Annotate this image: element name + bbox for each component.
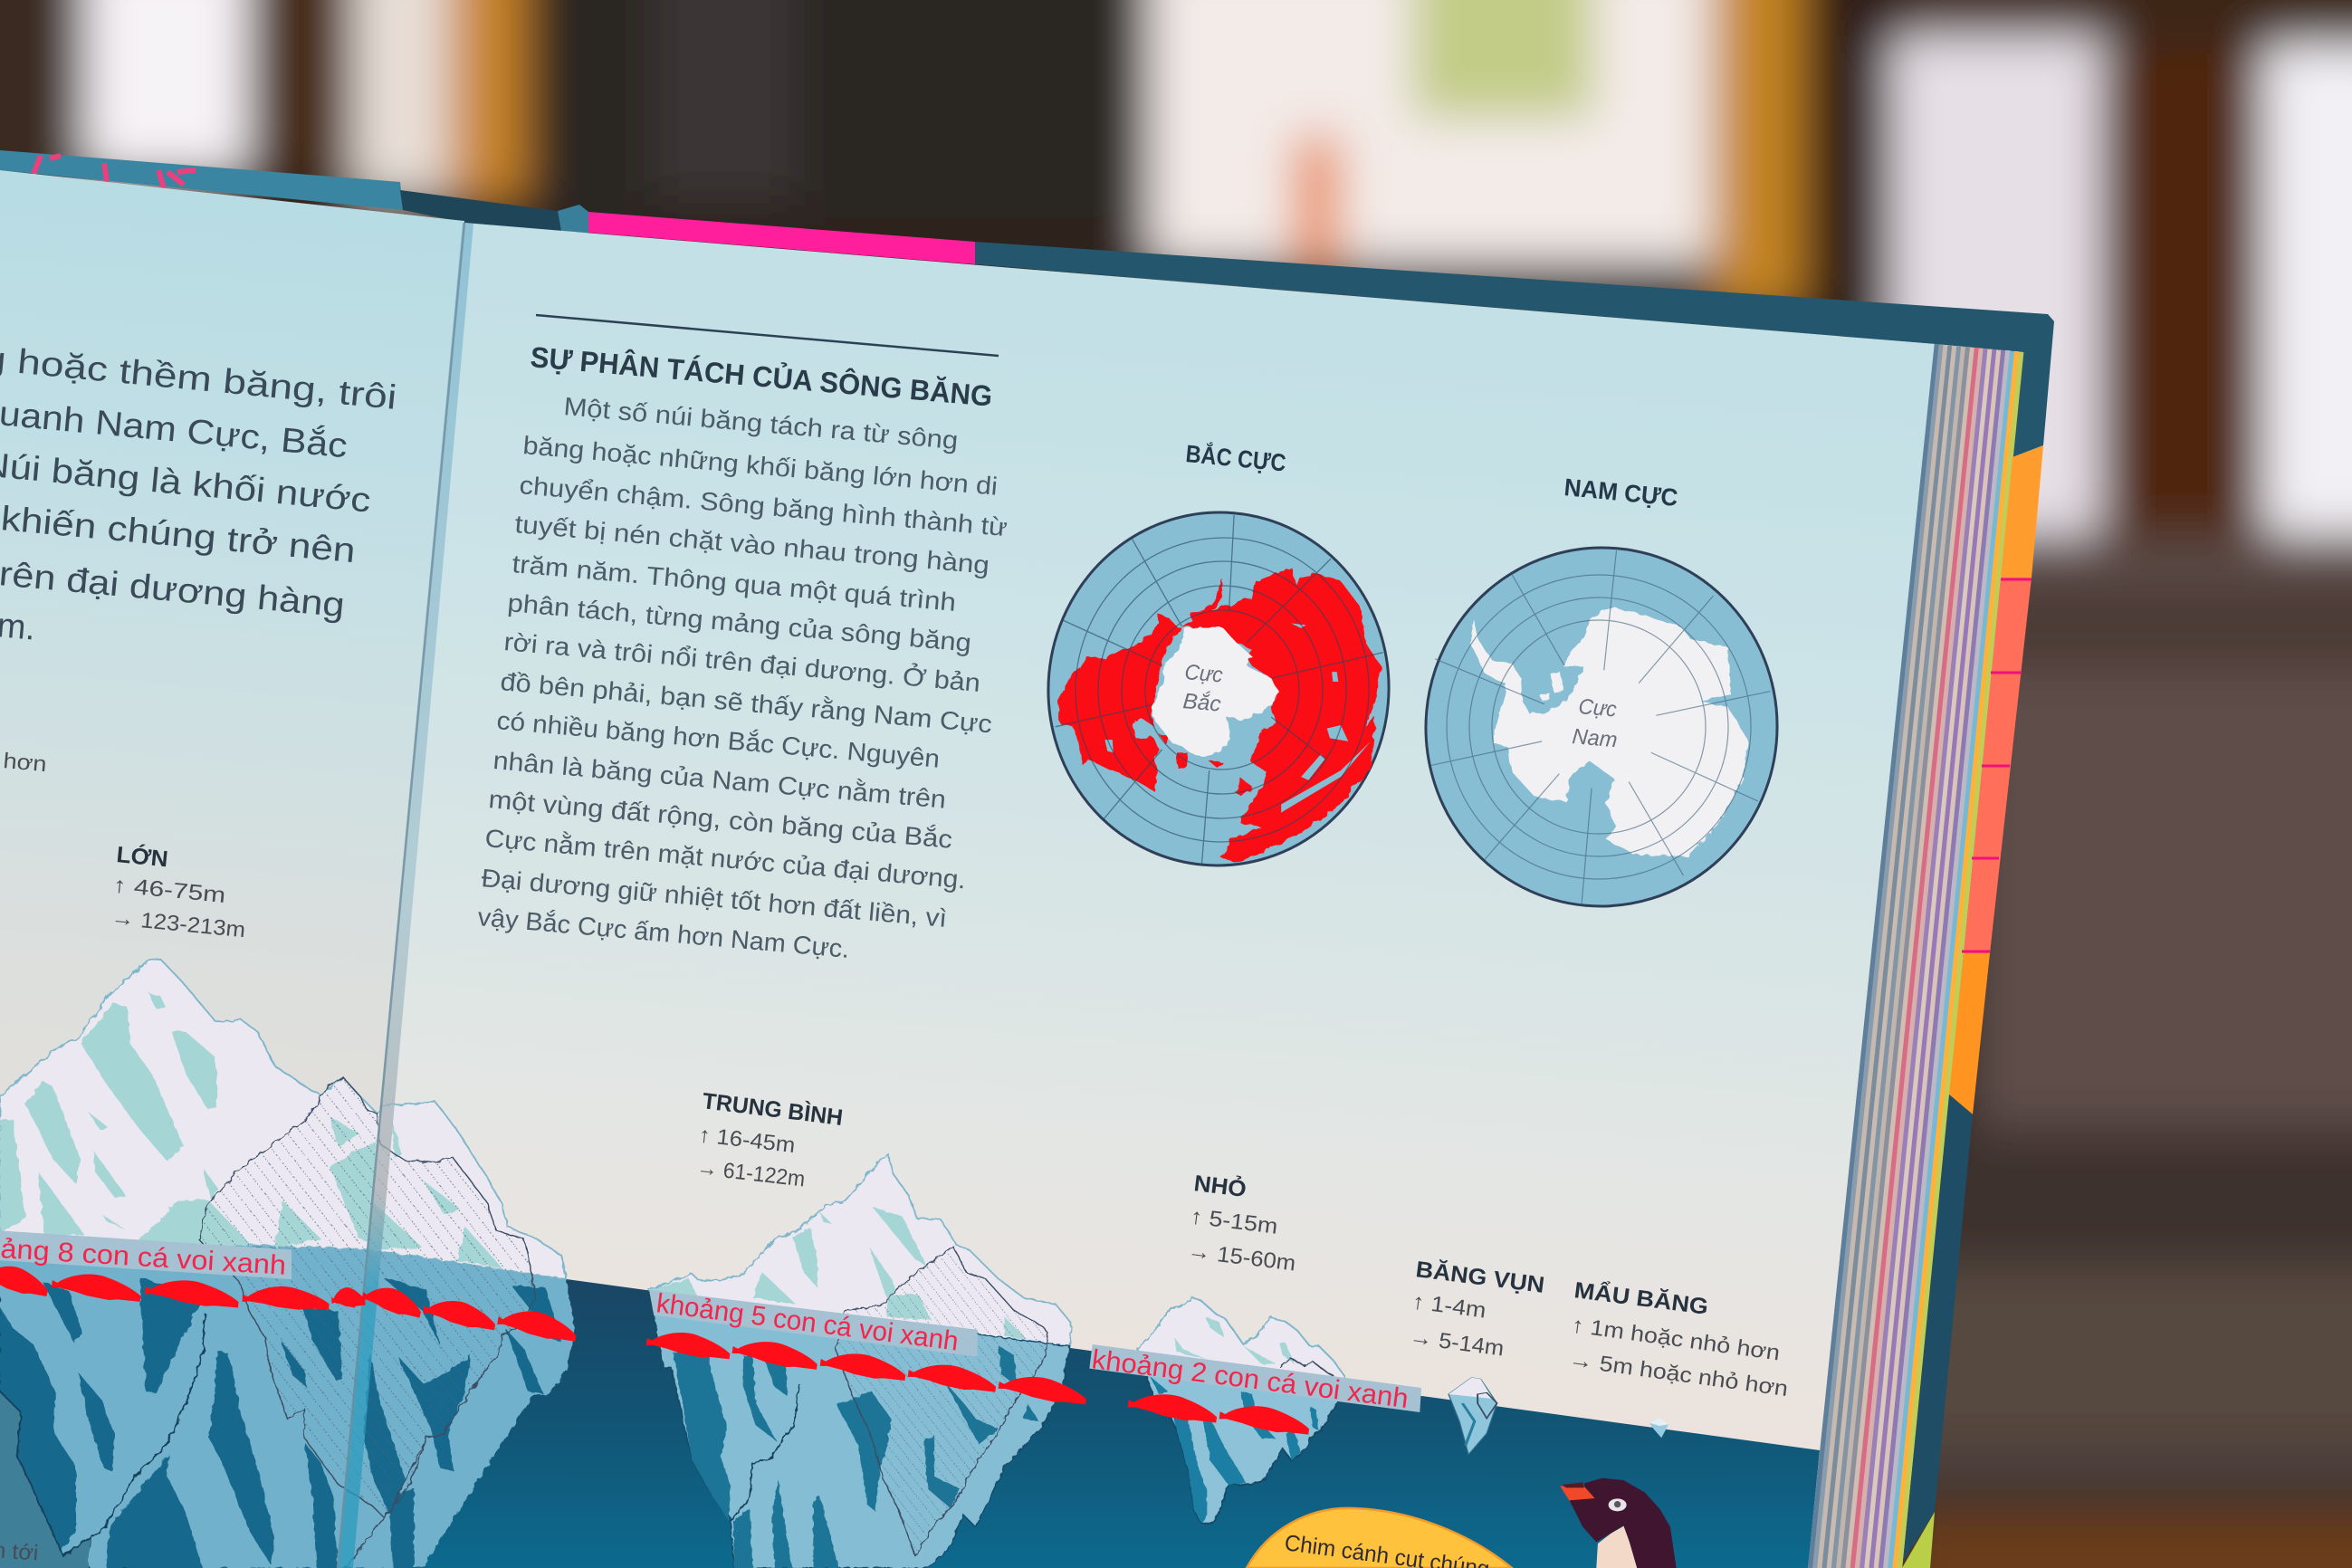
label: bergy bit (1408, 1256, 1546, 1362)
heading: SỰ PHÂN TÁCH CỦA SÔNG BĂNG (529, 340, 994, 413)
book cover top edge (0, 150, 2054, 457)
antarctic landmass (1470, 607, 1748, 856)
bergy bit (1448, 1378, 1497, 1455)
label Cực Nam: Cực (1577, 694, 1618, 722)
body text: nhân là băng của Nam Cực nằm trên (492, 746, 947, 814)
left page body text (0, 339, 398, 648)
map title south: NAM CỰC (1563, 473, 1679, 512)
whale label small: khoảng 2 con cá voi xanh (1090, 1344, 1410, 1414)
label: growler: → 5m hoặc nhỏ hơn (1567, 1347, 1790, 1401)
map: Antarctic (1410, 533, 1793, 921)
body text: đồ bên phải, bạn sẽ thấy rằng Nam Cực (499, 667, 993, 738)
arctic ice cap (1152, 626, 1278, 758)
label: medium iceberg (695, 1087, 845, 1192)
left page (0, 170, 464, 1568)
label: large iceberg: LỚN (115, 840, 169, 872)
left page body text: uanh Nam Cực, Bắc (0, 394, 349, 465)
label Cực Bắc: Bắc (1181, 689, 1222, 717)
heading rule (536, 315, 999, 356)
right page (338, 223, 1935, 1568)
left page body text: khiến chúng trở nên (0, 500, 357, 570)
whales large (0, 1260, 578, 1343)
label Cực Nam: Nam (1571, 724, 1619, 752)
label: growler: ↑ 1m hoặc nhỏ hơn (1570, 1313, 1782, 1365)
penguin (1560, 1478, 1677, 1568)
label band large (0, 1230, 292, 1279)
label: growler: MẨU BĂNG (1573, 1276, 1710, 1320)
body text: rời ra và trôi nổi trên đại dương. Ở bản (502, 626, 981, 697)
label: growler (1567, 1276, 1790, 1401)
label: bergy bit: → 5-14m (1408, 1324, 1506, 1362)
medium iceberg (649, 1154, 1072, 1568)
body text: băng hoặc những khối băng lớn hơn di (521, 431, 999, 501)
arctic seas (1105, 624, 1371, 812)
small iceberg underwater (1141, 1360, 1344, 1524)
whales small (1127, 1390, 1311, 1437)
label: small iceberg: ↑ 5-15m (1189, 1204, 1279, 1239)
antarctic graticule (1430, 550, 1770, 904)
body text: tuyết bị nén chặt vào nhau trong hàng (513, 510, 990, 579)
hatched iceberg section (198, 1076, 535, 1518)
left page body text: rên đại dương hàng (0, 555, 346, 625)
label: small iceberg: NHỎ (1192, 1169, 1248, 1202)
medium iceberg underwater (649, 1291, 1070, 1568)
speech bubble (1247, 1508, 1512, 1568)
body text: chuyển chậm. Sông băng hình thành từ (518, 471, 1009, 541)
whale label medium: khoảng 5 con cá voi xanh (655, 1288, 961, 1357)
left page small text: hơn (2, 749, 48, 777)
label band small (1089, 1344, 1421, 1412)
label: large iceberg: → 123-213m (110, 905, 246, 942)
whales medium (645, 1328, 1088, 1406)
label: small iceberg: → 15-60m (1186, 1238, 1297, 1276)
iceberg underwater (0, 1239, 575, 1568)
label band medium (649, 1290, 978, 1357)
large iceberg (0, 960, 575, 1568)
label: bergy bit: ↑ 1-4m (1410, 1289, 1487, 1324)
body text: có nhiều băng hơn Bắc Cực. Nguyên (495, 706, 941, 773)
label Cực Nam (1571, 694, 1619, 752)
book cover right edge (1902, 445, 2043, 1568)
label: large iceberg: ↑ 46-75m (111, 873, 226, 908)
body text: một vùng đất rộng, còn băng của Bắc (487, 785, 953, 854)
label: small iceberg (1186, 1169, 1297, 1276)
body text: trăm năm. Thông qua một quá trình (511, 550, 957, 617)
arctic graticule (1056, 515, 1383, 865)
page block stripes (1808, 344, 2023, 1568)
label: medium iceberg: → 61-122m (695, 1155, 807, 1192)
body text: phân tách, từng mảng của sông băng (506, 588, 972, 657)
map title north: BẮC CỰC (1184, 439, 1287, 477)
body text: vậy Bắc Cực ấm hơn Nam Cực. (476, 903, 851, 963)
body text (476, 392, 1009, 963)
label: medium iceberg: TRUNG BÌNH (701, 1087, 845, 1131)
growler (1649, 1418, 1668, 1438)
label: bergy bit: BĂNG VỤN (1414, 1256, 1546, 1298)
ocean (0, 1236, 1820, 1568)
label Cực Bắc (1181, 660, 1224, 717)
body text: Cực nằm trên mặt nước của đại dương. (483, 824, 967, 894)
label: medium iceberg: ↑ 16-45m (697, 1123, 797, 1158)
map: Arctic (1034, 498, 1403, 880)
body text: Một số núi băng tách ra từ sông (562, 392, 960, 454)
spine gutter (337, 223, 473, 1568)
body text: Đại dương giữ nhiệt tốt hơn đất liền, vì (480, 864, 948, 932)
label: large iceberg (110, 840, 246, 942)
label Cực Bắc: Cực (1183, 660, 1224, 688)
small iceberg (1089, 1297, 1421, 1524)
